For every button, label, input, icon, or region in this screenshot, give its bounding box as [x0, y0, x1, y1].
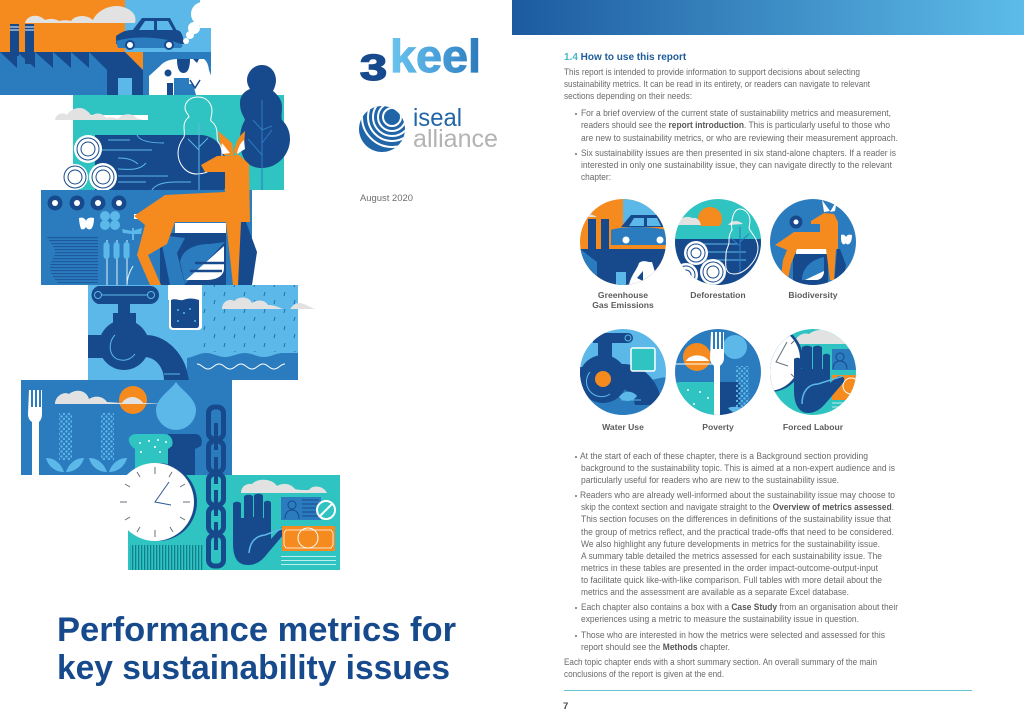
- icon: biodiversity circle: [770, 199, 856, 285]
- text block: bullet 6: Those who are interested in how the metrics were selected and assessed for this: [581, 630, 885, 640]
- text block: bullets 1 and 2: readers should see the report introduction. This is particularly useful to those who: [581, 120, 890, 130]
- panel: factory and car: [0, 0, 224, 95]
- text block: intro: [564, 67, 870, 101]
- title: [57, 611, 456, 687]
- icon: greenhouse gas circle: [580, 199, 666, 285]
- text block: bullet 4: [575, 490, 895, 597]
- icon: dark tree: [240, 65, 290, 190]
- icon: forced labour circle: [770, 329, 856, 415]
- icon: reeds: [104, 240, 133, 285]
- logo: 3keel: keel: [390, 30, 481, 82]
- text block: bullets 1 and 2: chapter:: [581, 172, 611, 182]
- icon: log rings: [62, 135, 117, 191]
- cover illustration: [0, 0, 340, 570]
- icon: bread: [129, 434, 202, 475]
- text block: bullet 4: metrics and the assessment are available as a separate Excel database.: [581, 587, 849, 597]
- text block: closing: conclusions of the report is given at the end.: [564, 669, 724, 679]
- icon: iseal globe: [359, 106, 405, 152]
- icon: butterfly: [79, 218, 94, 229]
- date: August 2020: [360, 193, 413, 204]
- panel: water: [88, 285, 315, 380]
- logo: iseal alliance: [359, 106, 497, 152]
- text block: closing: Each topic chapter ends with a short summary section. An overall summary of the main: [564, 657, 877, 667]
- icon: poverty circle: [675, 329, 761, 415]
- stripes: [281, 553, 336, 568]
- icon: car: [116, 18, 184, 50]
- icon: clock: [116, 463, 197, 541]
- text block: bullet 4: We also highlight any future developments in metrics for the sustainability issue.: [581, 539, 880, 549]
- text block: bullet 5: experiences using a metric to measure the sustainability issue in question.: [581, 614, 859, 624]
- text block: bullets 1 and 2: are new to sustainability metrics, or who are reviewing their measurement approach.: [581, 133, 898, 143]
- icon: sun: [119, 386, 147, 414]
- icon: hand: [233, 494, 288, 565]
- page number: 7: [563, 701, 568, 712]
- icon: crops: [46, 413, 127, 472]
- text block: bullet 4: This section focuses on the differences in definitions of the sustainability issue that: [581, 514, 891, 524]
- icon: fork: [28, 390, 42, 475]
- panel: poverty: [21, 380, 232, 475]
- text block: bullet 3: particularly useful for readers who are new to the sustainability issue.: [581, 475, 839, 485]
- icon: outline tree: [178, 97, 222, 190]
- text block: bullet 4: to facilitate quick like-with-like comparison. Full tables with more detail about the: [581, 575, 882, 585]
- text block: bullet 5: [575, 602, 898, 624]
- icon: flowers: [48, 196, 126, 210]
- title: Performance metrics for: [57, 611, 456, 649]
- text block: intro: sustainability metrics. It can be read in its entirety, or readers can navigate to relevant: [564, 79, 870, 89]
- text block: bullets 1 and 2: [575, 108, 898, 182]
- label: Gas Emissions: [592, 300, 654, 310]
- icon: clover: [100, 211, 120, 230]
- icon: banknote: [282, 526, 335, 551]
- icon: water drop: [156, 382, 196, 430]
- text block: bullet 4: A summary table detailed the metrics assessed for each sustainability issue. The: [581, 551, 882, 561]
- icon: cloud: [55, 108, 143, 120]
- text block: bullet 6: [575, 630, 885, 652]
- icon: cloud: [241, 480, 334, 493]
- logo: 3keel: [360, 30, 481, 88]
- text block: bullet 6: report should see the Methods chapter.: [581, 642, 730, 652]
- icon: id card: [281, 497, 335, 520]
- icon: deer: [134, 131, 250, 285]
- text block: bullet 5: Each chapter also contains a box with a Case Study from an organisation about their: [581, 602, 898, 612]
- panel: forest: [55, 65, 290, 191]
- icon: chain: [208, 407, 224, 566]
- icon: tap: [88, 286, 189, 380]
- text block: bullets 1 and 2: For a brief overview of the current state of sustainability metrics and measurement,: [581, 108, 891, 118]
- icon: striped disc: [186, 246, 225, 280]
- text block: bullet 4: skip the context section and navigate straight to the Overview of metrics assessed.: [581, 502, 894, 512]
- label: Poverty: [702, 422, 734, 432]
- icon: dragonfly: [122, 228, 142, 240]
- title: key sustainability issues: [57, 649, 450, 687]
- icon: cow: [149, 59, 213, 95]
- text block: bullet 3: [575, 451, 895, 485]
- label: Deforestation: [690, 290, 746, 300]
- icon: water wave: [187, 353, 298, 380]
- icon: log: [95, 135, 226, 190]
- text block: bullet 4: metrics in these tables are presented in the order impact-outcome-output-input: [581, 563, 878, 573]
- text block: bullet 4: the group of metrics reflect, and the practical trade-offs that need to be considered.: [581, 527, 894, 537]
- label: Water Use: [602, 422, 644, 432]
- text block: bullets 1 and 2: interested in only one sustainability issue, they can navigate directly to the relevant: [581, 160, 892, 170]
- stripes: [130, 545, 203, 570]
- text block: intro: sections depending on their needs:: [564, 91, 692, 101]
- section heading: 1.4 How to use this report: [564, 52, 687, 63]
- logo: iseal alliance: alliance: [413, 125, 498, 153]
- text block: bullet 4: Readers who are already well-informed about the sustainability issue may choose to: [580, 490, 895, 500]
- icon: cloud: [222, 297, 315, 309]
- logo: 3keel: 3: [360, 47, 387, 88]
- label: Forced Labour: [783, 422, 844, 432]
- text block: bullet 3: background to the sustainability topic. This is aimed at a non-expert audience and is: [581, 463, 895, 473]
- icon: cloud: [55, 391, 168, 404]
- icon: water ripple lines: [47, 237, 98, 283]
- panel: forced labour: [116, 407, 340, 570]
- text block: intro: This report is intended to provide information to support decisions about selecting: [564, 67, 860, 77]
- top gradient bar: [512, 0, 1024, 35]
- text block: bullet 3: At the start of each of these chapter, there is a Background section providing: [580, 451, 868, 461]
- icon: deforestation circle: [674, 199, 761, 287]
- icon: water use circle: [579, 329, 666, 415]
- panel: biodiversity: [41, 190, 257, 285]
- text block: closing: [564, 657, 877, 679]
- label: Biodiversity: [788, 290, 838, 300]
- icon: smoke: [183, 0, 224, 44]
- icon: glass: [169, 285, 202, 330]
- logo: iseal alliance: iseal: [413, 104, 462, 132]
- label: Greenhouse: [598, 290, 648, 300]
- text block: bullets 1 and 2: Six sustainability issues are then presented in six stand-alone chapters. If a reader is: [581, 148, 896, 158]
